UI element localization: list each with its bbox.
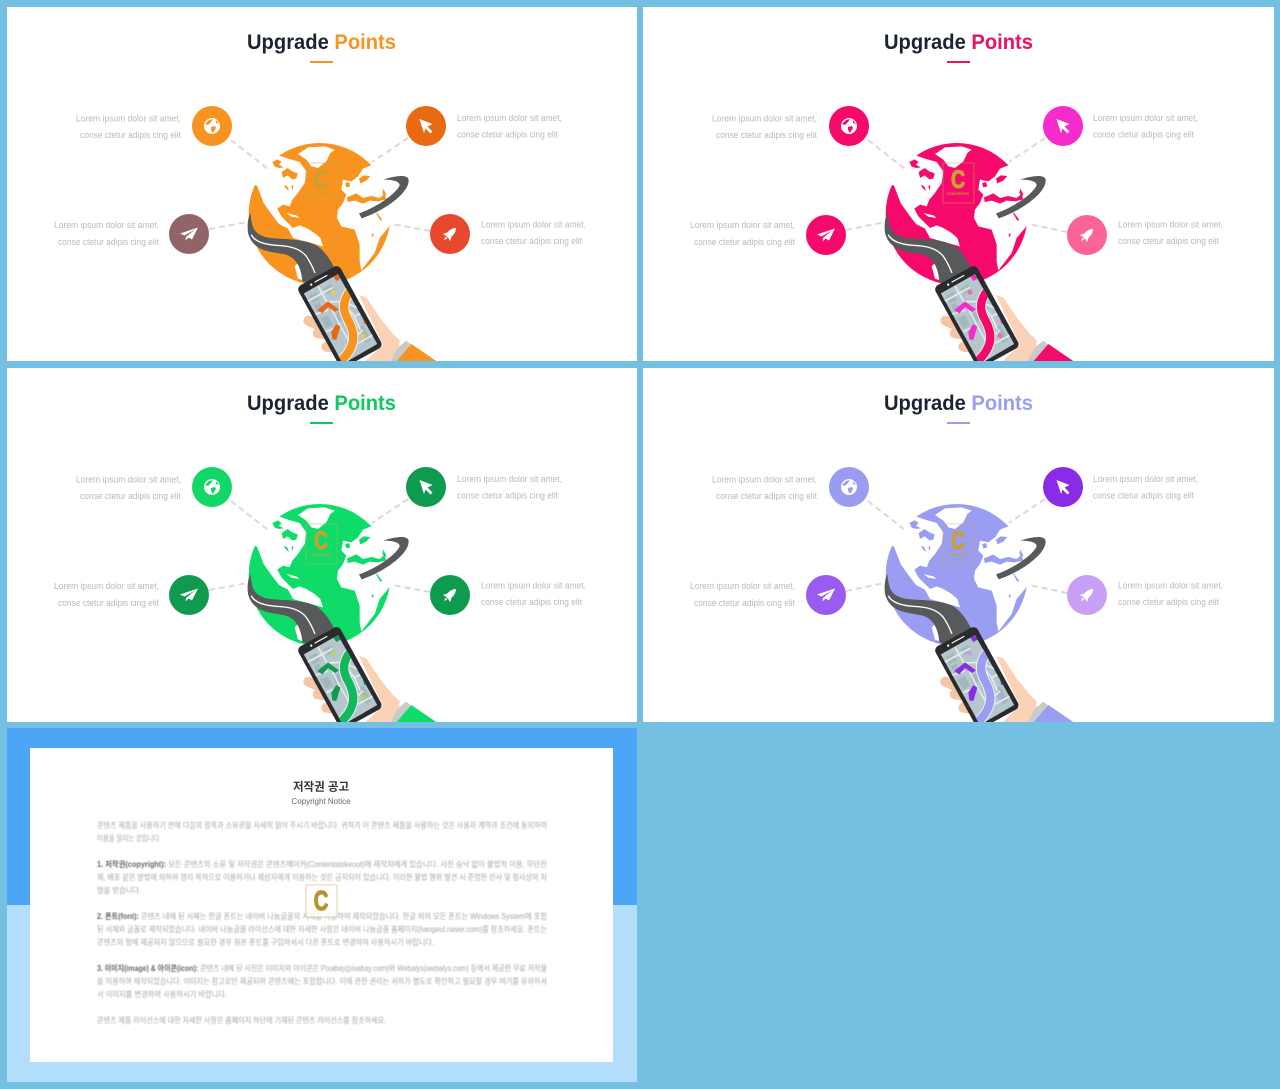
text: bottom left [54,220,159,248]
text: bottom right: Lorem ipsum dolor sit amet, [1118,580,1223,592]
globe and phone illustration [248,504,440,730]
phone map [298,266,382,361]
text: bottom right: conse ctetur adipis cing elit [1118,236,1219,247]
text: top right [457,474,562,502]
text: top right: Lorem ipsum dolor sit amet, [1093,474,1198,485]
watermark: CONTENTS [310,191,332,196]
title: Upgrade Points [884,30,1033,54]
text: top left [76,114,181,141]
text: top right [1093,474,1198,502]
watermark [306,524,337,564]
text: bottom left: Lorem ipsum dolor sit amet, [690,581,795,592]
notice body text: 1. 저작권(copyright): 모든 콘텐츠의 소유 및 저작권은 콘텐츠메이커(Contentstokeout)에 제작자에게 있습니다. 사전 승낙 없이 불법적 이용, 무단전 [97,859,547,869]
text: top left: Lorem ipsum dolor sit amet, [712,474,817,486]
orbit swoosh [996,176,1046,218]
text: bottom left [690,220,795,248]
icon: globe [829,467,869,507]
notice body text: 2. 폰트(font): 콘텐츠 내에 된 서체는 한글 폰트는 네이버 나눔글꼴의 서체를 사용하여 제작되었습니다. 한글 외의 모든 폰트는 Windows System에 포함 [97,911,548,921]
title underline [310,422,333,424]
icon: paper plane [806,215,846,255]
connector lines [209,499,430,592]
hand [945,295,1077,363]
icon: rocket [430,214,470,254]
text: bottom left: Lorem ipsum dolor sit amet, [54,220,159,231]
watermark: C [951,527,965,555]
notice body text: 된 서체와 글꼴로 제작되었습니다. 네이버 나눔글꼴 라이선스에 대한 자세한 사항은 네이버 나눔글꼴 홈페이지(hangeul.naver.com)를 참조하세요. 폰트는 [97,924,547,934]
watermark [306,885,337,917]
panel: purple upgrade points slide [643,368,1274,730]
icon: cursor [406,467,446,507]
watermark: C [951,166,965,194]
watermark: C [314,166,328,194]
text: bottom left: Lorem ipsum dolor sit amet, [54,581,159,592]
text: top right [457,113,562,140]
panel: orange upgrade points slide [7,7,637,369]
text: bottom left: conse ctetur adipis cing elit [694,237,795,248]
notice body text: 이용을 알리는 것입니다. [97,833,161,843]
text: bottom right: Lorem ipsum dolor sit amet, [481,580,586,592]
globe [886,504,1034,646]
notice body text: 콘텐츠의 형에 제공되지 않으므로 필요한 경우 원본 폰트를 구입하셔서 다른 폰트로 변경하여 사용하시기 바랍니다. [97,937,434,947]
text: top left: Lorem ipsum dolor sit amet, [712,114,817,124]
road [248,213,336,285]
globe [249,504,397,646]
title: Upgrade Points [884,391,1033,415]
globe and phone illustration [885,143,1077,369]
text: bottom right [481,220,586,247]
globe and phone illustration [885,504,1077,730]
text: bottom right [1118,220,1223,247]
text: bottom left: Lorem ipsum dolor sit amet, [690,220,795,231]
connector lines [846,499,1067,593]
text: bottom left [54,581,159,609]
icon: paper plane [806,575,846,615]
text: top right: conse ctetur adipis cing elit [457,130,558,140]
panel: pink upgrade points slide [643,7,1274,369]
text: top left: Lorem ipsum dolor sit amet, [76,114,181,124]
notice subheading: Copyright Notice [291,797,351,806]
globe [249,143,397,285]
hand [308,656,440,724]
notice body text: 을 이용하여 제작되었습니다. 이미지는 참고로만 제공되며 콘텐츠에는 포함합니다. 이에 관한 권리는 귀하가 별도로 확인하고 필요할 경우 여기를 유의하셔 [97,976,547,986]
text: top right: conse ctetur adipis cing elit [457,490,558,502]
road [885,213,973,285]
text: bottom right: Lorem ipsum dolor sit amet, [481,220,586,230]
text: top left: conse ctetur adipis cing elit [716,130,817,141]
watermark: C [314,886,328,917]
text: top left [712,114,817,141]
text: bottom left: conse ctetur adipis cing elit [694,598,795,609]
icon: rocket [1067,215,1107,255]
text: top left: conse ctetur adipis cing elit [80,130,181,141]
notice body text: 벌을 받습니다. [97,885,141,895]
panel: copyright notice slide [7,728,637,1082]
text: top left: conse ctetur adipis cing elit [716,491,817,502]
icon: globe [829,106,869,146]
notice body text: 3. 이미지(image) & 아이콘(icon): 콘텐츠 내에 된 사진은 이미지와 아이콘은 Pixabay(pixabay.com)와 Webalys(webalys.com) 등에서 제공한 무료 저작물 [97,963,547,973]
text: top left [76,474,181,502]
notice body text: 콘텐츠 제품 라이선스에 대한 자세한 사항은 홈페이지 하단에 기재된 콘텐츠 라이선스를 참조하세요. [97,1015,386,1025]
text: top right: Lorem ipsum dolor sit amet, [1093,113,1198,124]
notice body text: 서 이미지를 변경하여 사용하시기 바랍니다. [97,989,227,999]
icon: paper plane [169,575,209,615]
watermark: CONTENTS [947,552,969,557]
globe [886,143,1034,285]
title underline [947,61,970,63]
watermark [943,524,974,564]
text: bottom right [481,580,586,608]
watermark: CONTENTS [310,552,332,557]
text: bottom left [690,581,795,609]
text: bottom left: conse ctetur adipis cing elit [58,237,159,248]
title: Upgrade Points [247,30,396,54]
notice card [30,748,613,1062]
text: top left: Lorem ipsum dolor sit amet, [76,474,181,486]
watermark [306,163,337,203]
road [885,574,973,646]
title underline [310,61,333,63]
icon: globe [192,106,232,146]
icon: cursor [406,106,446,146]
connector lines [846,138,1067,232]
text: top right [1093,113,1198,140]
icon: rocket [1067,575,1107,615]
watermark: CONTENTS [947,191,969,196]
watermark [943,163,974,203]
text: top right: conse ctetur adipis cing elit [1093,130,1194,140]
text: top left [712,474,817,502]
text: top left: conse ctetur adipis cing elit [80,491,181,502]
panel: green upgrade points slide [7,368,637,730]
notice heading: 저작권 공고 [293,780,349,794]
icon: cursor [1043,106,1083,146]
orbit swoosh [359,537,409,579]
text: top right: Lorem ipsum dolor sit amet, [457,113,562,124]
title: Upgrade Points [247,391,396,415]
text: bottom right [1118,580,1223,608]
hand [945,656,1077,724]
text: top right: conse ctetur adipis cing elit [1093,490,1194,502]
phone map [935,266,1019,361]
icon: globe [192,467,232,507]
phone map [298,627,382,722]
icon: cursor [1043,467,1083,507]
text: bottom right: conse ctetur adipis cing elit [1118,597,1219,608]
connector lines [209,138,430,231]
text: top right: Lorem ipsum dolor sit amet, [457,474,562,485]
watermark: C [314,527,328,555]
road [248,574,336,646]
orbit swoosh [996,537,1046,579]
notice body text: 재, 배포 같은 방법에 의하여 영리 목적으로 이용하거나 제삼자에게 이용하는 것은 금지되어 있습니다. 이러한 불법 행위 발견 시 준엄한 민사 및 형사상의 처 [97,872,547,882]
icon: paper plane [169,214,209,254]
phone map [935,627,1019,722]
icon: rocket [430,575,470,615]
globe and phone illustration [248,143,440,369]
text: bottom right: Lorem ipsum dolor sit amet, [1118,220,1223,230]
notice body text: 콘텐츠 제품을 사용하기 전에 다음의 항목과 소유권을 자세히 읽어 주시기 바랍니다. 귀하가 이 콘텐츠 제품을 사용하는 것은 사용자 계약과 조건에 동의하여 [97,820,547,830]
hand [308,295,440,363]
text: bottom right: conse ctetur adipis cing elit [481,597,582,608]
text: bottom left: conse ctetur adipis cing elit [58,598,159,609]
title underline [947,422,970,424]
orbit swoosh [359,176,409,218]
text: bottom right: conse ctetur adipis cing elit [481,236,582,247]
notice body text [97,820,548,1025]
